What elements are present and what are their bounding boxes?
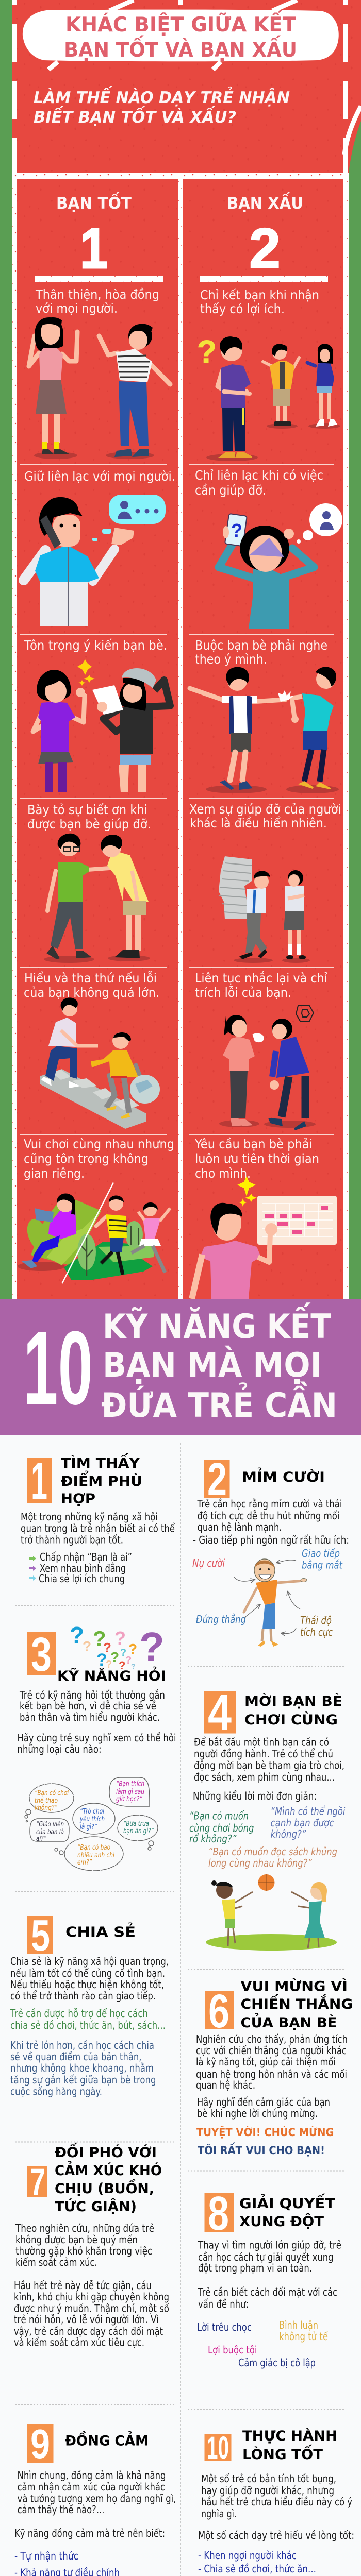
panel: skill 3: ? bbox=[131, 1662, 136, 1670]
panel: skill 7 bbox=[14, 2142, 170, 2348]
column heading: good friend: BẠN TỐT bbox=[56, 192, 132, 213]
illustration: girl scolding bbox=[219, 1006, 316, 1130]
panel: skill 3: “Bạn có chơi bbox=[35, 1790, 69, 1797]
panel: skill 9: - Tự nhận thức bbox=[14, 2550, 78, 2562]
panel: skill 7: Theo nghiên cứu, những đứa trẻ bbox=[15, 2222, 154, 2234]
text: good friend 3: Tôn trọng ý kiến bạn bè. bbox=[24, 638, 167, 653]
panel: skill 5: chia sẻ đồ chơi, thức ăn, bút, sách... bbox=[10, 2019, 166, 2031]
illustration: privacy scene bbox=[18, 1183, 170, 1283]
panel: skill 4: Những kiểu lời mời đơn giản: bbox=[193, 1790, 317, 1802]
panel: skill 1: HỢP bbox=[61, 1491, 95, 1507]
panel: skill 10: - Khen ngợi người khác bbox=[198, 2549, 297, 2562]
panel: skill 9: và tưởng tượng xem họ đang nghĩ gì, bbox=[18, 2493, 176, 2505]
illustration: boy helping friend on stairs bbox=[40, 997, 160, 1129]
panel: skill 1: 1 bbox=[31, 1451, 47, 1511]
text: bad friend 2 bbox=[195, 468, 323, 498]
question heading: BIẾT BẠN TỐT VÀ XẤU? bbox=[34, 106, 236, 127]
divider right bbox=[189, 1134, 334, 1135]
illustration: boy with paper stack and girl bbox=[219, 856, 310, 963]
illustration: worried girl with phone: ? bbox=[231, 520, 242, 541]
panel: skill 10: - Chia sẻ đồ chơi, thức ăn... bbox=[198, 2563, 316, 2575]
panel: skill 4: 4 bbox=[208, 1684, 232, 1740]
panel: skill 3: Trẻ có kỹ năng hỏi tốt thường gắn bbox=[19, 1689, 165, 1701]
panel: skill 8: GIẢI QUYẾT bbox=[239, 2194, 336, 2212]
central dashed divider bbox=[180, 1443, 181, 2576]
text: bad friend 2: cần giúp đỡ. bbox=[195, 483, 266, 498]
panel: skill 3: KỸ NĂNG HỎI bbox=[57, 1666, 166, 1684]
panel: skill 10: Một số trẻ có bản tính tốt bụng, bbox=[201, 2472, 336, 2485]
text: bad friend 3 bbox=[195, 638, 327, 667]
panel: skill 3: “Trò chơi bbox=[80, 1808, 104, 1816]
panel: skill 5: CHIA SẺ bbox=[65, 1922, 136, 1940]
panel: skill 3: “Bạn thích bbox=[116, 1781, 144, 1788]
banner: ten skills: BẠN MÀ MỌI bbox=[103, 1345, 322, 1385]
panel: skill 4: CHƠI CÙNG bbox=[244, 1711, 338, 1728]
panel: skill 5: có thể trở thành rào cản giao tiếp. bbox=[10, 1990, 156, 2002]
text: good friend 4: Bày tỏ sự biết ơn khi bbox=[27, 802, 147, 817]
panel: skill 3: em?” bbox=[77, 1859, 92, 1867]
panel: skill 2: Đứng thẳng bbox=[196, 1613, 246, 1625]
text: good friend 1: với mọi người. bbox=[36, 301, 118, 316]
panel: skill 10: LÒNG TỐT bbox=[242, 2444, 323, 2463]
dotted rule right bbox=[188, 1666, 346, 1667]
illustration: two cheerful girls with paper bbox=[33, 659, 170, 792]
panel: skill 9: cảm nhận cảm xúc của người khác bbox=[18, 2481, 165, 2493]
panel: skill 5 bbox=[10, 1911, 169, 2098]
panel: skill 7: CẢM XÚC KHÓ bbox=[55, 2161, 162, 2179]
panel: skill 1 bbox=[21, 1451, 175, 1585]
panel: skill 6: Hãy nghĩ đến cảm giác của bạn bbox=[197, 2096, 330, 2108]
panel: skill 10 bbox=[198, 2428, 354, 2576]
dotted rule bbox=[15, 2141, 174, 2142]
panel: skill 3: ? bbox=[128, 1641, 137, 1657]
divider right bbox=[189, 798, 334, 799]
panel: skill 1: ĐIỂM PHÙ bbox=[61, 1470, 142, 1489]
dotted rule right bbox=[188, 2170, 346, 2171]
illustration: boy thinking with question mark bbox=[197, 334, 340, 461]
panel: skill 4: “Mình có thể ngồi bbox=[270, 1805, 346, 1818]
panel: skill 5: tăng sự gắn kết giữa bạn bè trong bbox=[10, 2074, 156, 2086]
text: good friend 1 bbox=[35, 287, 159, 316]
panel: skill 7: được như ý muốn. Thậm chí, một số bbox=[14, 2302, 170, 2314]
panel: skill 3: của bạn là bbox=[36, 1828, 64, 1836]
panel: skill 3: ? bbox=[139, 1624, 165, 1670]
panel: skill 3: kết bạn bè hơn, vì dễ chia sẻ về bbox=[20, 1700, 156, 1712]
column heading: bad friend: BẠN XẤU bbox=[227, 192, 303, 213]
divider bbox=[20, 967, 167, 968]
panel: skill 5: 5 bbox=[31, 1911, 50, 1960]
panel: skill 4: MỜI BẠN BÈ bbox=[244, 1693, 342, 1709]
question heading: LÀM THẾ NÀO DẠY TRẺ NHẬN bbox=[34, 87, 290, 107]
panel: skill 4: “Bạn có muốn bbox=[189, 1809, 249, 1822]
panel: skill 3: Hãy cùng trẻ suy nghĩ xem có thể hỏi bbox=[18, 1732, 176, 1744]
text: good friend 5 bbox=[24, 971, 159, 1000]
panel: skill 3: ? bbox=[93, 1626, 106, 1651]
panel: skill 9: cảm thấy thế nào?... bbox=[18, 2503, 104, 2516]
panel: skill 7: TỨC GIẬN) bbox=[55, 2198, 137, 2215]
panel: skill 1: Một trong những kỹ năng xã hội bbox=[21, 1511, 158, 1523]
divider bbox=[20, 464, 167, 465]
panel: skill 9: Kỹ năng đồng cảm mà trẻ nên biết: bbox=[14, 2527, 165, 2539]
panel: skill 8: không tử tế bbox=[279, 2330, 329, 2343]
panel: skill 3: ai?” bbox=[36, 1835, 46, 1843]
title: BẠN TỐT VÀ BẠN XẤU bbox=[64, 35, 297, 62]
text: bad friend 6 bbox=[194, 1137, 319, 1181]
panel: skill 1: Chia sẻ lợi ích chung bbox=[39, 1572, 125, 1585]
illustration: boys forgiving bbox=[44, 834, 150, 963]
divider bbox=[20, 634, 167, 635]
panel: skill 4: không?” bbox=[270, 1828, 306, 1840]
text: bad friend 6: cho mình. bbox=[195, 1166, 251, 1181]
panel: skill 2: Nụ cười bbox=[192, 1557, 225, 1569]
panel: skill 4: đọc sách, xem phim cùng nhau... bbox=[194, 1771, 335, 1783]
dotted rule bbox=[15, 2404, 174, 2405]
panel: skill 3: ? bbox=[120, 1647, 126, 1658]
divider bbox=[20, 1134, 167, 1135]
panel: skill 3: bản thân và tìm hiểu người khác. bbox=[20, 1711, 160, 1723]
panel: skill 6: CỦA BẠN BÈ bbox=[240, 2012, 337, 2031]
panel: skill 7: Hầu hết trẻ này dễ tức giận, cáu bbox=[14, 2279, 152, 2292]
title bbox=[23, 10, 339, 62]
panel: skill 3: ? bbox=[83, 1638, 91, 1654]
panel: skill 3: “Bữa trưa bbox=[123, 1820, 149, 1828]
panel: skill 10: nghĩa gì. bbox=[201, 2507, 237, 2520]
panel: skill 4: người đồng hành. Trẻ có thể chủ bbox=[194, 1748, 333, 1760]
text: bad friend 5: Liên tục nhắc lại và chỉ bbox=[195, 971, 327, 986]
text: bad friend 4: Xem sự giúp đỡ của người bbox=[189, 802, 341, 817]
panel: skill 2: quan hệ lành mạnh. bbox=[197, 1521, 282, 1533]
text: bad friend 1: thấy có lợi ích. bbox=[200, 301, 285, 316]
panel: skill 1: Xem nhau bình đẳng bbox=[40, 1562, 126, 1574]
panel: skill 8: vấn đề như: bbox=[198, 2298, 249, 2310]
panel: skill 10: THỰC HÀNH bbox=[242, 2428, 337, 2444]
panel: skill 9: Nhìn chung, đồng cảm là khả năng bbox=[18, 2469, 166, 2481]
dotted rule bbox=[15, 1891, 174, 1892]
panel: skill 3: là gì?” bbox=[80, 1823, 97, 1831]
divider right bbox=[189, 967, 334, 968]
panel: skill 9: 9 bbox=[30, 2421, 50, 2467]
panel: skill 10: hay giúp đỡ người khác, nhưng bbox=[201, 2484, 334, 2497]
number 1: 1 bbox=[80, 217, 108, 280]
panel: skill 7: ĐỐI PHÓ VỚI bbox=[55, 2142, 157, 2161]
banner: ten skills: ĐỨA TRẺ CẦN bbox=[101, 1381, 337, 1425]
divider right bbox=[189, 634, 334, 635]
title: KHÁC BIỆT GIỮA KẾT bbox=[65, 10, 296, 37]
panel: skill 3: ? bbox=[103, 1640, 111, 1655]
illustration: boy with calendar bbox=[192, 1176, 337, 1299]
illustration: worried girl with phone bbox=[219, 503, 342, 629]
panel: skill 4: Để bắt đầu một tình bạn cần có bbox=[194, 1736, 329, 1749]
panel: skill 3: ? bbox=[119, 1659, 125, 1672]
panel: skill 2: tích cực bbox=[300, 1626, 333, 1638]
banner: ten skills: KỸ NĂNG KẾT bbox=[103, 1302, 331, 1346]
panel: skill 7: không được bạn bè quý mến bbox=[15, 2233, 138, 2246]
panel: skill 3: không?” bbox=[35, 1804, 57, 1812]
panel: skill 3: ? bbox=[70, 1622, 84, 1649]
panel: skill 3: ? bbox=[114, 1628, 126, 1649]
panel: skill 4: rổ không?” bbox=[189, 1833, 237, 1845]
text: good friend 5: Hiểu và tha thứ nếu lỗi bbox=[24, 971, 157, 986]
panel: skill 5: Trẻ cần được hỗ trợ để học cách bbox=[10, 2007, 148, 2020]
text: bad friend 2: Chỉ liên lạc khi có việc bbox=[195, 468, 323, 483]
panel: skill 8: XUNG ĐỘT bbox=[239, 2213, 324, 2230]
text: good friend 2: Giữ liên lạc với mọi người. bbox=[24, 469, 175, 484]
panel: skill 2: MỈM CƯỜI bbox=[242, 1467, 325, 1485]
panel: skill 6 bbox=[196, 1978, 353, 2157]
panel: skill 2: Thái độ bbox=[300, 1614, 332, 1626]
panel: skill 5: Khi trẻ lớn hơn, cần học cách chia bbox=[10, 2039, 154, 2052]
illustration: two friendly girls bbox=[29, 317, 170, 459]
panel: skill 4: cạnh bạn được bbox=[270, 1817, 334, 1829]
bar left bbox=[35, 276, 163, 282]
text: bad friend 3: theo ý mình. bbox=[195, 652, 267, 667]
text: bad friend 6: Yêu cầu bạn bè phải bbox=[194, 1137, 313, 1151]
panel: skill 8: 8 bbox=[208, 2187, 229, 2240]
text: good friend 1: Thân thiện, hòa đồng bbox=[35, 287, 159, 302]
panel: skill 2 bbox=[192, 1454, 349, 1647]
panel: skill 3: ? bbox=[110, 1649, 119, 1665]
text: bad friend 4 bbox=[189, 802, 341, 831]
panel: skill 4 bbox=[189, 1684, 346, 1951]
text: bad friend 1: Chỉ kết bạn khi nhận bbox=[200, 287, 319, 302]
panel: skill 3: “Bạn có bao bbox=[77, 1844, 110, 1852]
text: good friend 5: của bạn không quá lớn. bbox=[24, 985, 159, 1000]
text: good friend 6: cũng tôn trọng không bbox=[24, 1151, 149, 1166]
panel: skill 7: thường gặp khó khăn trong việc bbox=[15, 2245, 152, 2257]
text: bad friend 4: khác là điều hiển nhiên. bbox=[190, 816, 327, 831]
panel: skill 4: cùng chơi bóng bbox=[189, 1822, 254, 1834]
panel: skill 8: Bình luận bbox=[279, 2319, 318, 2331]
panel: skill 8: Lợi buộc tội bbox=[208, 2344, 257, 2356]
panel: skill 1: TÌM THẤY bbox=[61, 1453, 140, 1471]
panel: skill 5: Chia sẻ là kỹ năng xã hội quan trọng, bbox=[10, 1955, 169, 1968]
panel: skill 3: 3 bbox=[31, 1628, 52, 1681]
panel: skill 2: 2 bbox=[207, 1454, 227, 1505]
panel: skill 7: 7 bbox=[30, 2161, 45, 2203]
panel: skill 3: ? bbox=[125, 1655, 132, 1666]
panel: skill 4: long cùng nhau không?” bbox=[208, 1857, 313, 1869]
illustration: boy thinking with question mark: ? bbox=[197, 334, 217, 370]
panel: skill 8 bbox=[197, 2187, 341, 2369]
panel: skill 10: 10 bbox=[207, 2430, 229, 2465]
panel: skill 3: ? bbox=[96, 1650, 107, 1670]
panel: skill 3: “Giáo viên bbox=[36, 1821, 64, 1828]
panel: skill 5: nhưng không khoe khoang, nhằm bbox=[10, 2062, 154, 2074]
panel: skill 3 bbox=[18, 1622, 176, 1871]
panel: skill 6: CHIẾN THẮNG bbox=[240, 1994, 353, 2012]
panel: skill 7: trẻ nói hỗn, vô lễ với người lớn. Vì bbox=[14, 2313, 159, 2326]
panel: skill 9 bbox=[14, 2421, 176, 2576]
number 2: 2 bbox=[249, 217, 281, 280]
panel: skill 1: Chấp nhận “Bạn là ai” bbox=[40, 1551, 132, 1563]
text: bad friend 5: trích lỗi của bạn. bbox=[195, 985, 291, 1000]
text: bad friend 6: luôn ưu tiên thời gian bbox=[195, 1151, 319, 1166]
text: good friend 4 bbox=[27, 802, 151, 832]
panel: skill 3: yêu thích bbox=[79, 1816, 105, 1823]
panel: skill 3: thể thao bbox=[35, 1797, 58, 1805]
panel: skill 2: bằng mắt bbox=[302, 1559, 343, 1571]
panel: skill 9: ĐỒNG CẢM bbox=[65, 2431, 149, 2449]
panel: skill 3: nhiêu anh chị bbox=[77, 1852, 114, 1859]
panel: skill 6: TUYỆT VỜI! CHÚC MỪNG bbox=[196, 2125, 334, 2139]
panel: skill 5: Nếu thiếu hoặc thực hiện không tốt, bbox=[10, 1978, 164, 1991]
panel: skill 7: kỉnh, khó chịu khi gặp chuyện không bbox=[14, 2291, 169, 2303]
panel: skill 8: Cảm giác bị cô lập bbox=[238, 2357, 316, 2369]
panel: skill 8: cần học cách tự giải quyết xung bbox=[198, 2251, 333, 2263]
panel: skill 6: bè khi nghe lời chúng mừng. bbox=[197, 2107, 318, 2120]
panel: skill 2: Giao tiếp bbox=[302, 1547, 340, 1560]
panel: skill 3: bạn ăn gì?” bbox=[123, 1827, 154, 1835]
panel: skill 3: ? bbox=[106, 1659, 112, 1670]
panel: skill 5: sẻ về quan điểm của bản thân, bbox=[10, 2050, 141, 2063]
panel: skill 6: TÔI RẤT VUI CHO BẠN! bbox=[198, 2142, 325, 2157]
text: bad friend 1 bbox=[200, 287, 319, 316]
text: good friend 6: Vui chơi cùng nhau nhưng bbox=[24, 1137, 174, 1151]
panel: skill 7: kiểm soát cảm xúc. bbox=[15, 2256, 97, 2268]
text: good friend 6: gian riêng. bbox=[24, 1166, 85, 1181]
banner: ten skills bbox=[0, 1299, 361, 1435]
panel: skill 5: cuộc sống hàng ngày. bbox=[10, 2086, 102, 2098]
panel: skill 1: quan trọng là trẻ nhận biết ai có thể bbox=[21, 1522, 175, 1534]
panel: skill 7: và kiểm soát cảm xúc tiêu cực. bbox=[14, 2336, 144, 2348]
text: bad friend 5 bbox=[195, 971, 327, 1000]
dotted rule bbox=[15, 1605, 174, 1606]
illustration: boy pushing friend away bbox=[190, 667, 339, 793]
panel: skill 6: quan hệ khác. bbox=[196, 2079, 255, 2091]
panel: skill 7: CHỊU (BUỒN, bbox=[55, 2178, 154, 2197]
text: good friend 6 bbox=[24, 1137, 174, 1181]
divider right bbox=[189, 464, 334, 465]
panel: skill 3: giờ học?” bbox=[116, 1795, 142, 1803]
panel: skill 8: đột trong phạm vi an toàn. bbox=[198, 2262, 312, 2274]
panel: skill 6: 6 bbox=[208, 1985, 229, 2038]
bar right bbox=[200, 276, 328, 282]
question heading bbox=[34, 87, 290, 127]
panel: skill 6: VUI MỪNG VÌ bbox=[240, 1978, 348, 1995]
panel: skill 3: những loại câu nào: bbox=[18, 1743, 101, 1755]
banner: ten skills: 10 bbox=[23, 1310, 93, 1427]
illustration: boy on the phone bbox=[24, 495, 166, 626]
panel: running track bbox=[0, 0, 361, 1299]
panel: skill 1: trở thành người bạn tốt. bbox=[21, 1533, 123, 1546]
divider bbox=[20, 798, 167, 799]
panel: skill 8: Lời trêu chọc bbox=[197, 2321, 252, 2333]
text: bad friend 3: Buộc bạn bè phải nghe bbox=[195, 638, 327, 653]
panel: skill 5: nếu làm tốt có thể củng cố tình bạn. bbox=[10, 1967, 165, 1979]
dotted rule right bbox=[188, 2409, 346, 2410]
text: good friend 4: được bạn bè giúp đỡ. bbox=[27, 817, 151, 832]
panel: skill 3: làm gì sau bbox=[116, 1788, 144, 1796]
dotted rule right bbox=[188, 1969, 346, 1970]
panel: skill 7: vậy, trẻ cần được dạy cách đối mặt bbox=[14, 2325, 163, 2337]
